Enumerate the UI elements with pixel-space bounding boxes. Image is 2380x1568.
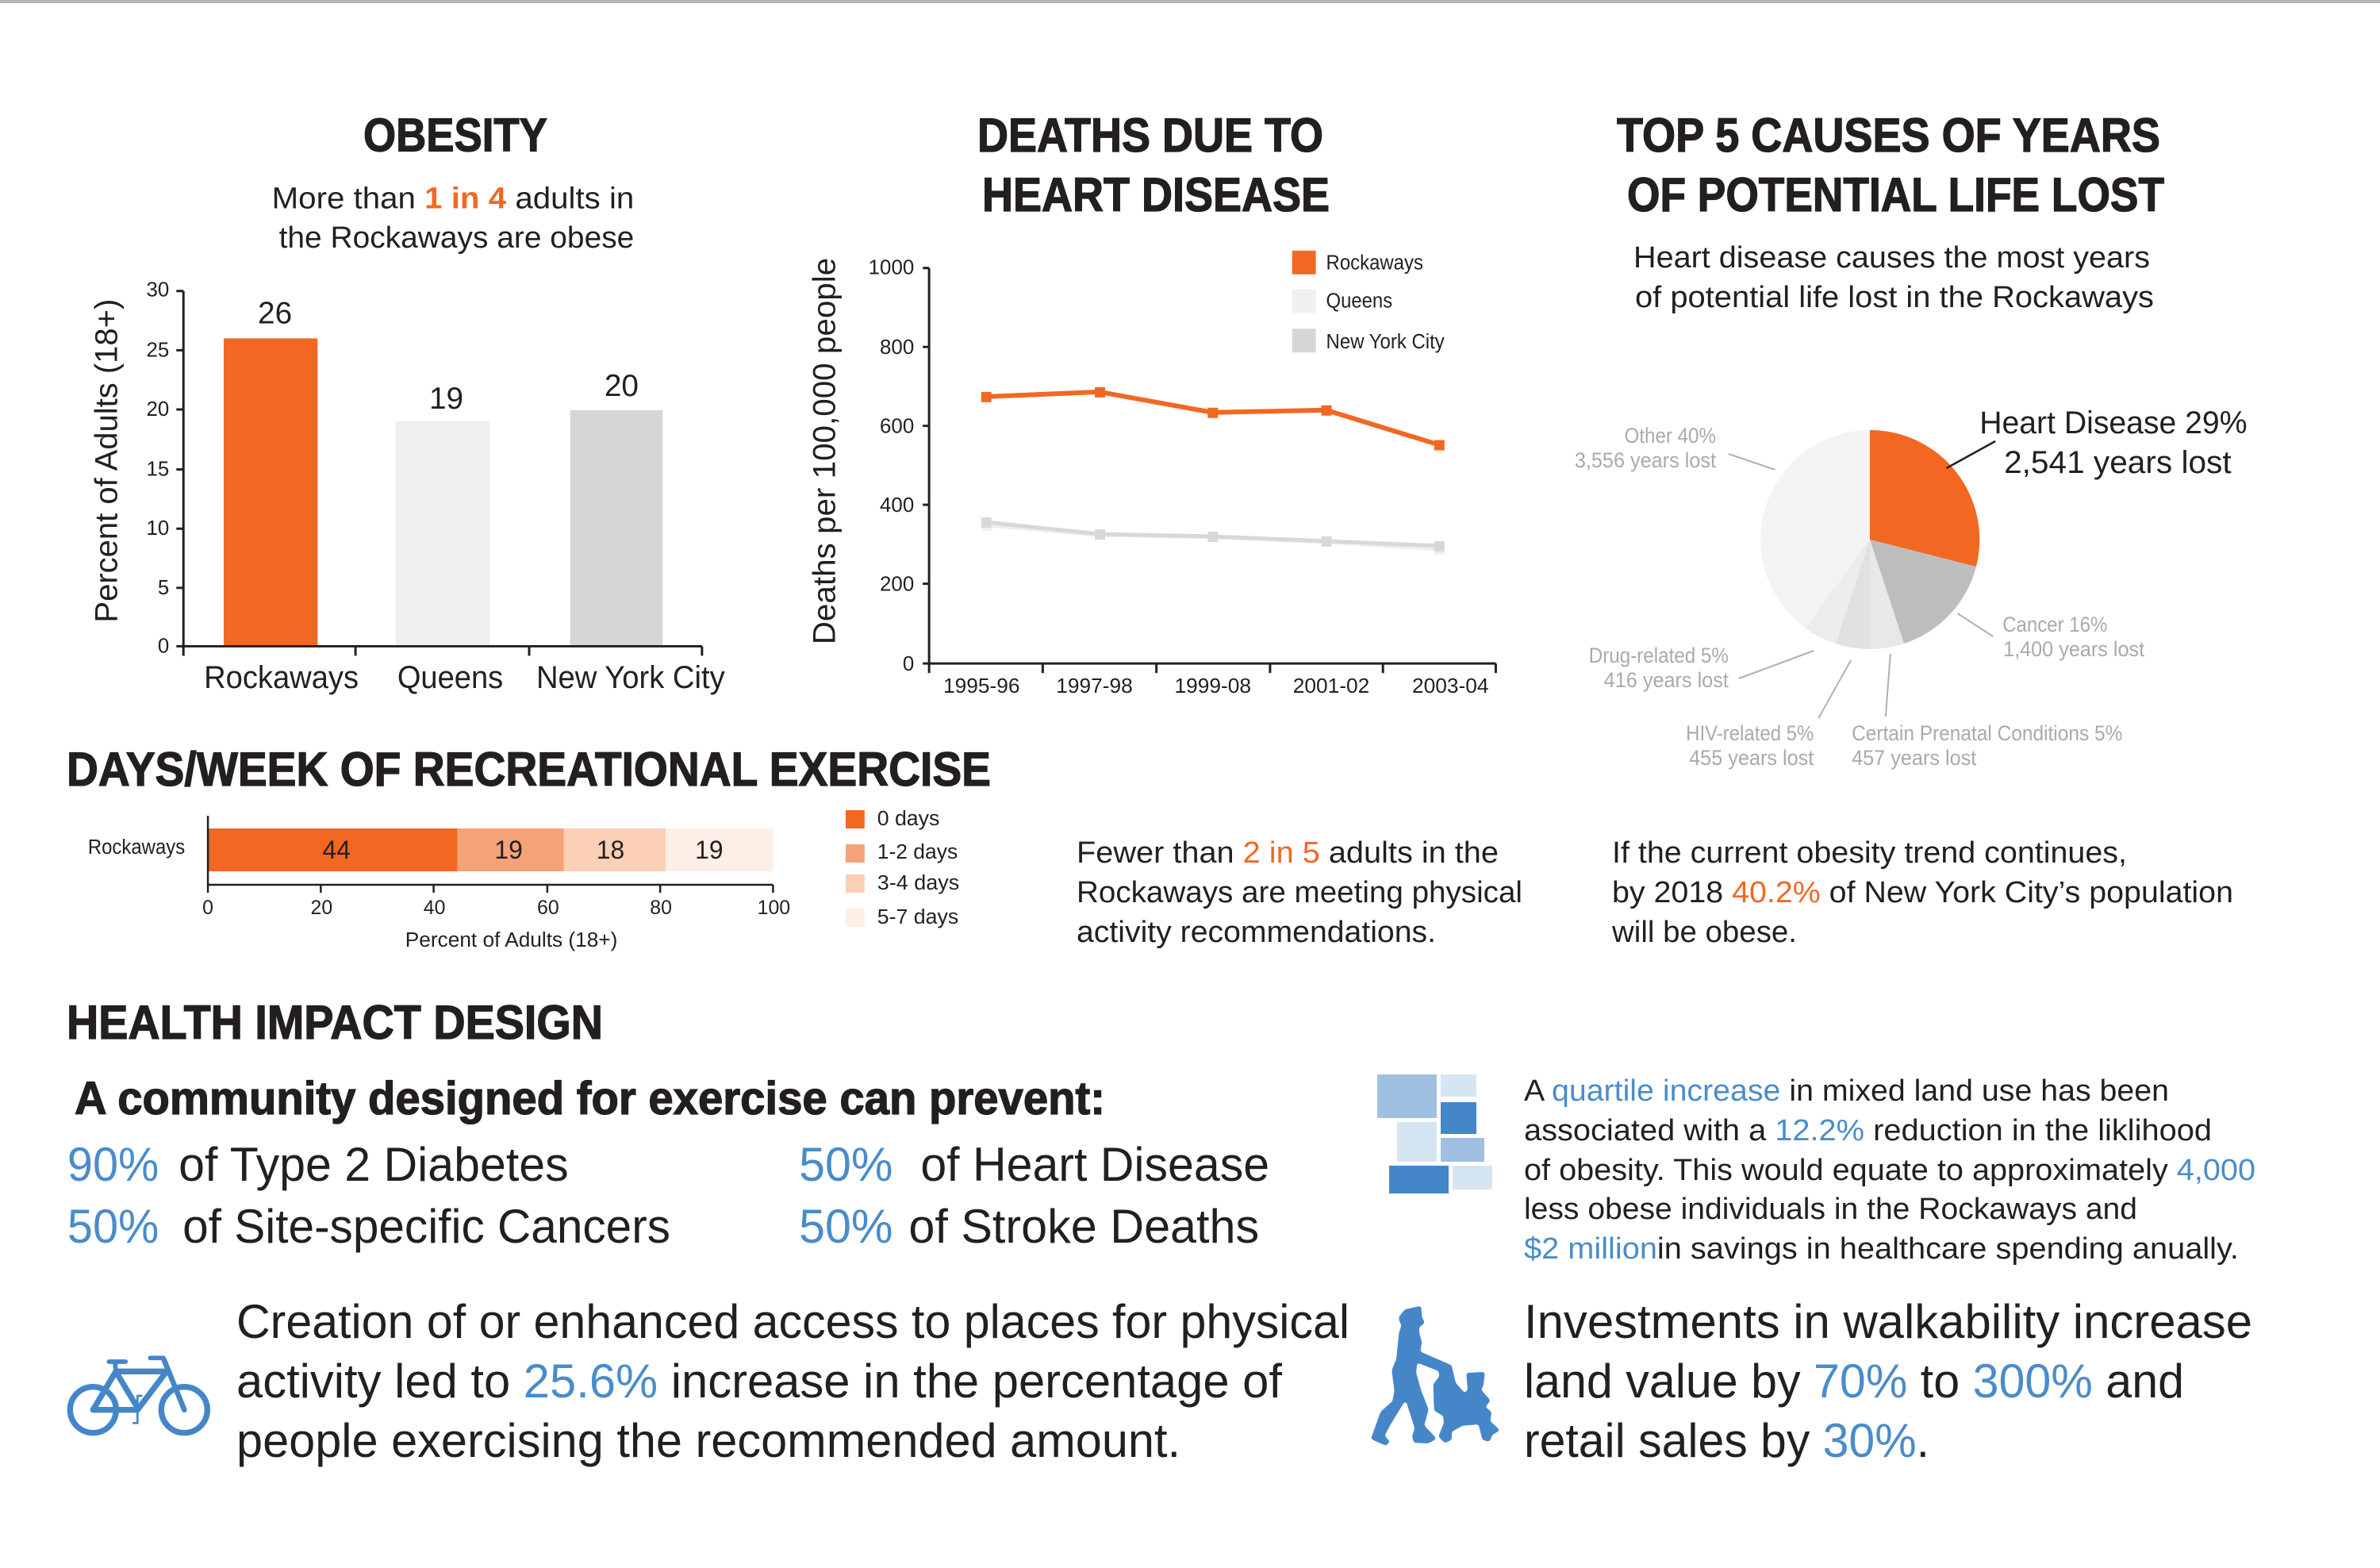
line chart: heart disease deaths: 2001-02 [1293,675,1369,698]
bar chart: obesity: 30 [147,279,169,302]
text: walkability investments [1524,1295,2252,1467]
icon: person with stroller [1372,1308,1498,1444]
bar chart: obesity: 0 [158,635,169,657]
line chart: heart disease deaths: 2003-04 [1412,675,1489,698]
text: mixed land use: of obesity. This would equate to approximately 4,000 [1524,1154,2255,1187]
panel: health impact design [67,996,2255,1467]
heading: deaths due to heart disease [977,109,1330,221]
legend: exercise days: 1-2 days [877,841,958,863]
pie label: drug-related: 416 years lost [1604,668,1729,692]
stats: preventable conditions: 90% [67,1138,159,1191]
series: rockaways [981,387,1445,451]
text: physical activity recommendations: activity recommendations. [1077,916,1436,949]
stacked bar chart: exercise: 80 [650,897,672,919]
bar chart: obesity: 5 [158,577,169,599]
heading: health impact design: HEALTH IMPACT DESIGN [67,996,603,1049]
line chart: heart disease deaths: 800 [880,336,914,359]
stats: preventable conditions: 50% [799,1200,893,1253]
legend: Rockaways [1326,252,1423,275]
text: physical activity recommendations: Fewer than 2 in 5 adults in the [1077,836,1499,870]
bar chart: obesity: Queens [397,660,503,695]
pie label: cancer: 1,400 years lost [2003,637,2145,661]
stats: preventable conditions: 50% [67,1200,159,1253]
text: mixed land use [1524,1074,2255,1266]
stacked bar chart: exercise: Percent of Adults (18+) [405,929,617,951]
subheading: community designed for exercise: A community designed for exercise can prevent: [75,1073,1105,1124]
bar chart: obesity: 19 [429,382,463,416]
text: access to places for physical activity: activity led to 25.6% increase in the percentage of [236,1355,1282,1408]
bar chart: obesity: 15 [147,459,169,481]
text: walkability investments: retail sales by 30%. [1524,1414,1929,1467]
heading: deaths due to heart disease: DEATHS DUE TO [977,109,1323,162]
text: causes summary [1633,241,2154,314]
legend: Queens [1326,290,1392,312]
text: obesity trend: will be obese. [1611,916,1797,949]
pie labels [1575,405,2248,770]
series: new york city [981,517,1445,551]
series: queens [981,521,1445,555]
legend: exercise days: 0 days [877,808,939,830]
stats: preventable conditions: of Site-specific Cancers [182,1200,670,1253]
text: obesity summary: More than 1 in 4 adults in [272,182,634,215]
pie label: heart disease: 2,541 years lost [2004,445,2232,480]
text: access to places for physical activity: Creation of or enhanced access to places for physical [236,1295,1349,1348]
bar chart: obesity: 26 [258,297,292,331]
line chart: heart disease deaths: 600 [880,416,914,438]
text: walkability investments: land value by 70% to 300% and [1524,1355,2184,1408]
pie label: hiv-related [1686,660,1851,770]
text: causes summary: of potential life lost in the Rockaways [1635,281,2154,314]
text: walkability investments: Investments in walkability increase [1524,1295,2252,1348]
pie label: other: 3,556 years lost [1575,448,1716,472]
stacked bar chart: exercise: 20 [311,897,332,919]
heading: obesity: OBESITY [363,109,547,162]
pie label: certain prenatal conditions [1852,654,2122,770]
stacked bar chart: exercise: Rockaways [88,836,185,859]
stats: preventable conditions [67,1138,1269,1253]
legend: New York City [1326,331,1445,353]
pie label: heart disease [1946,405,2248,480]
stacked bar chart: exercise: 40 [424,897,445,919]
line chart: heart disease deaths: 0 [903,653,914,675]
bar chart: obesity: New York City [536,660,725,695]
text: obesity trend: by 2018 40.2% of New York City’s population [1612,876,2233,909]
panel: deaths due to heart disease [808,109,1495,698]
stacked bar chart: exercise: 19 [494,836,523,864]
stacked bar chart: exercise: 18 [597,836,624,864]
icon: bicycle [70,1358,207,1433]
legend: exercise days: 3-4 days [877,872,959,894]
pie chart: years of life lost [1760,430,1979,649]
legend [1292,251,1445,353]
bar chart: obesity: 10 [147,517,169,540]
stacked bar chart: exercise: 60 [537,897,559,919]
pie label: drug-related: Drug-related 5% [1589,644,1729,667]
stats: preventable conditions: of Heart Disease [920,1138,1269,1191]
stats: preventable conditions: of Type 2 Diabetes [178,1138,569,1191]
bar chart: obesity: 25 [147,339,169,361]
pie label: certain prenatal conditions: Certain Prenatal Conditions 5% [1852,721,2122,745]
line chart: heart disease deaths: 1995-96 [943,675,1020,698]
line chart: heart disease deaths [808,251,1495,698]
text: mixed land use: $2 millionin savings in healthcare spending anually. [1524,1232,2239,1266]
bar chart: obesity: Percent of Adults (18+) [90,299,125,623]
stacked bar chart: exercise: 0 [202,897,213,919]
text: physical activity recommendations [1077,836,1522,949]
line chart: heart disease deaths: 1997-98 [1056,675,1133,698]
legend: exercise days: 5-7 days [877,906,958,928]
pie label: drug-related [1589,644,1814,692]
text: physical activity recommendations: Rockaways are meeting physical [1077,876,1522,909]
text: mixed land use: less obese individuals in the Rockaways and [1524,1193,2137,1226]
stacked bar chart: exercise: 100 [758,897,790,919]
pie label: hiv-related: HIV-related 5% [1686,721,1814,745]
stacked bar chart: exercise: 44 [323,836,351,864]
pie label: hiv-related: 455 years lost [1689,746,1814,770]
line chart: heart disease deaths: 400 [880,494,914,517]
icon: mixed land use blocks [1377,1074,1492,1193]
text: mixed land use: A quartile increase in mixed land use has been [1524,1074,2169,1108]
stats: preventable conditions: of Stroke Deaths [908,1200,1259,1253]
panel: days per week of recreational exercise [67,743,2233,951]
stacked bar chart: exercise: 19 [695,836,724,864]
line chart: heart disease deaths: 200 [880,574,914,596]
text: obesity trend [1611,836,2233,949]
pie label: cancer [1957,613,2145,661]
line chart: heart disease deaths: 1999-08 [1175,675,1251,698]
panel: obesity [90,109,725,695]
heading: days/week of recreational exercise: DAYS/WEEK OF RECREATIONAL EXERCISE [67,743,991,796]
panel: top 5 causes of years of potential life lost [1575,109,2248,770]
pie label: other: Other 40% [1625,424,1716,448]
bar chart: obesity: 20 [605,369,639,403]
legend: exercise days [846,808,959,928]
text: obesity summary: the Rockaways are obese [279,221,634,255]
bar chart: obesity [90,279,725,695]
text: mixed land use: associated with a 12.2% reduction in the liklihood [1524,1114,2212,1147]
stats: preventable conditions: 50% [799,1138,893,1191]
line chart: heart disease deaths: 1000 [869,257,914,279]
text: obesity trend: If the current obesity trend continues, [1612,836,2127,870]
text: access to places for physical activity: people exercising the recommended amount. [236,1414,1180,1467]
heading: deaths due to heart disease: HEART DISEASE [982,168,1330,221]
heading: top 5 causes: TOP 5 CAUSES OF YEARS [1617,109,2160,162]
heading: top 5 causes: OF POTENTIAL LIFE LOST [1627,168,2164,221]
bar chart: obesity: Rockaways [204,660,359,695]
pie label: cancer: Cancer 16% [2002,613,2107,636]
bar chart: obesity: 20 [147,398,169,421]
pie label: heart disease: Heart Disease 29% [1979,405,2248,440]
pie label: other [1575,424,1775,472]
text: causes summary: Heart disease causes the most years [1633,241,2150,275]
heading: top 5 causes [1617,109,2164,221]
line chart: heart disease deaths: Deaths per 100,000 people [808,258,843,644]
stacked bar chart: exercise [88,816,790,951]
text: obesity summary [272,182,634,255]
pie label: certain prenatal conditions: 457 years lost [1852,746,1977,770]
text: access to places for physical activity [236,1295,1349,1467]
